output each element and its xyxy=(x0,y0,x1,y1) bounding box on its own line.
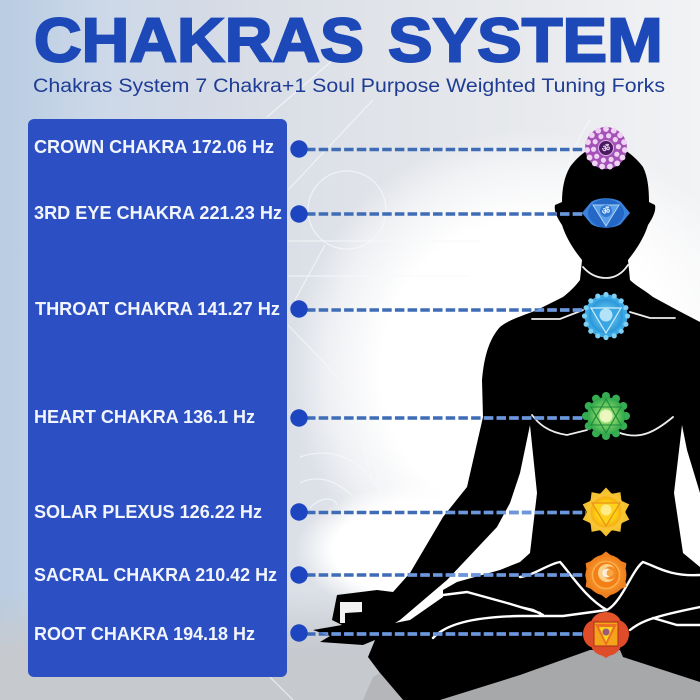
label: third eye chakra: 3RD EYE CHAKRA 221.23 Hz xyxy=(34,203,282,223)
icon: root chakra xyxy=(583,612,629,658)
icon: sacral chakra xyxy=(580,552,632,598)
title: SYSTEM xyxy=(388,6,663,75)
silhouette: meditating figure xyxy=(313,144,700,700)
title: CHAKRAS xyxy=(34,5,364,75)
label: sacral chakra: SACRAL CHAKRA 210.42 Hz xyxy=(34,565,277,585)
subtitle: Chakras System 7 Chakra+1 Soul Purpose Weighted Tuning Forks xyxy=(33,76,665,97)
label: heart chakra: HEART CHAKRA 136.1 Hz xyxy=(34,407,255,427)
icon: third eye chakra xyxy=(582,198,630,228)
icon: crown chakra: ॐ xyxy=(602,144,610,154)
title xyxy=(34,5,663,75)
icon: heart chakra xyxy=(582,392,630,440)
icon: third eye chakra: ॐ xyxy=(602,206,610,217)
icon: crown chakra xyxy=(584,126,628,170)
panel: chakra frequencies xyxy=(28,119,287,677)
icon: solar plexus chakra xyxy=(581,488,631,536)
connector lines with dots xyxy=(290,140,586,642)
label: throat chakra: THROAT CHAKRA 141.27 Hz xyxy=(35,299,280,319)
icon: throat chakra xyxy=(582,292,630,340)
label: solar plexus: SOLAR PLEXUS 126.22 Hz xyxy=(34,502,262,522)
label: crown chakra: CROWN CHAKRA 172.06 Hz xyxy=(34,137,274,157)
label: root chakra: ROOT CHAKRA 194.18 Hz xyxy=(34,624,255,644)
